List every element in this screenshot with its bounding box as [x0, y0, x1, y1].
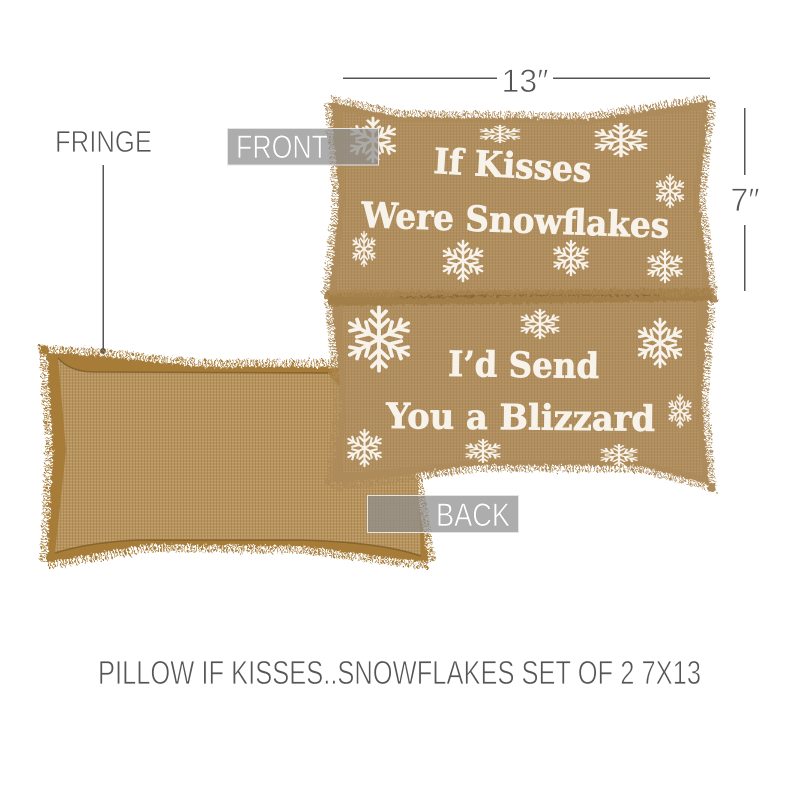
- pillow phrase: I'd Send You a Blizzard: [385, 344, 655, 440]
- lower pillow fringe: [331, 298, 709, 484]
- back pillow body: [55, 358, 421, 556]
- snowflakes: lower pillow: [345, 307, 692, 466]
- seam fringe between pillows: [328, 288, 712, 306]
- front pillow: lower: [326, 288, 714, 484]
- pillow phrase: I'd Send You a Blizzard: I’d Send: [448, 344, 599, 387]
- upper pillow fringe: [329, 101, 711, 296]
- front pillow: upper: [329, 101, 711, 296]
- back pillow fringe: [47, 353, 428, 562]
- back pillow crease shading: [55, 358, 421, 556]
- pillow phrase: If Kisses Were Snowflakes: Were Snowflakes: [360, 195, 670, 247]
- dimension: width 13 inches: 13″: [502, 63, 548, 99]
- pillow phrase: I'd Send You a Blizzard: You a Blizzard: [385, 396, 655, 440]
- callout: fringe label: [55, 124, 152, 354]
- dimension: height 7 inches: 7″: [730, 182, 760, 218]
- lower pillow body: [342, 302, 703, 476]
- callout: fringe label: FRINGE: [55, 124, 152, 159]
- label: back: [368, 496, 518, 533]
- pillow phrase: If Kisses Were Snowflakes: [360, 141, 670, 247]
- pillow phrase: If Kisses Were Snowflakes: If Kisses: [432, 141, 593, 191]
- label: back: BACK: [436, 497, 510, 533]
- label: front: FRONT: [236, 129, 328, 165]
- upper pillow body: [336, 110, 704, 290]
- back pillow: [47, 353, 428, 562]
- snowflakes: upper pillow: [348, 118, 685, 282]
